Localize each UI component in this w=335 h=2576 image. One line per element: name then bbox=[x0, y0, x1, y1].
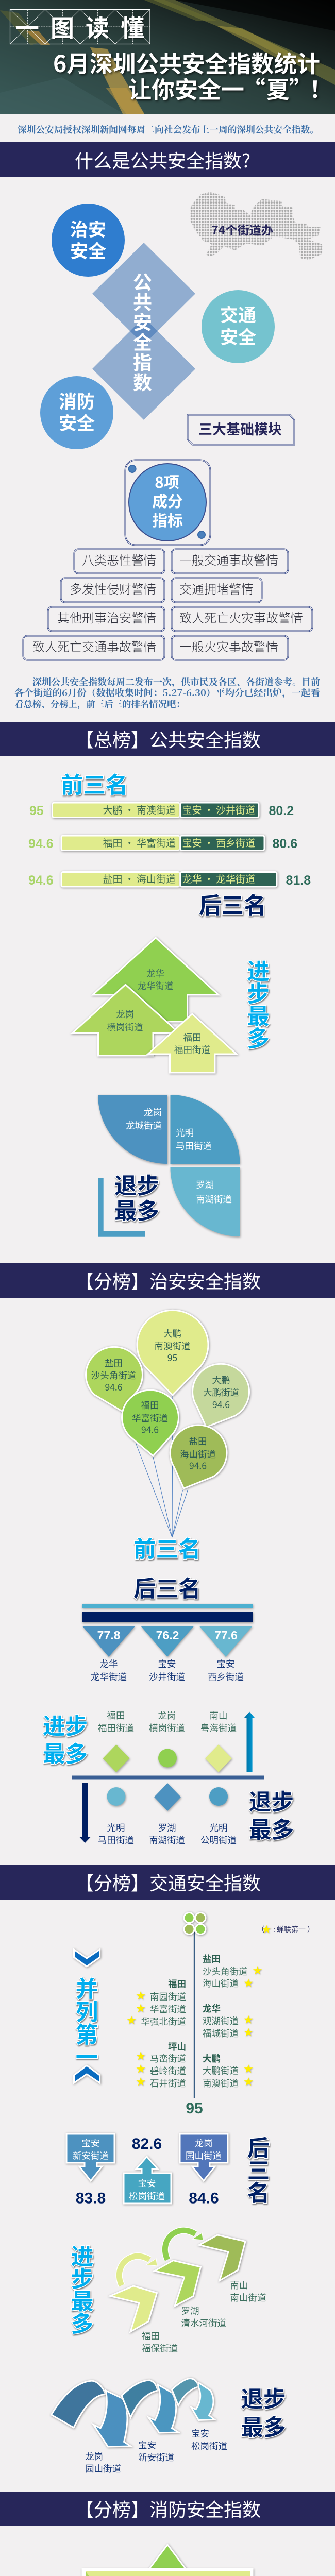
bottom three label: 后三名 bbox=[199, 888, 266, 920]
improved streets: 南山 bbox=[209, 1709, 228, 1722]
balloon: Dapeng Dapeng bbox=[193, 1364, 249, 1427]
arrow block: Longgang Yuanshan: 园山街道 bbox=[186, 2149, 222, 2162]
most improved label: 多 bbox=[247, 1021, 270, 1053]
diamonds: public safety index: 指 bbox=[133, 347, 152, 375]
balloon: Yantian Haishan: 盐田 bbox=[189, 1435, 207, 1448]
explanation paragraph: 各个街道的6月份（数据收集时间：5.27-6.30）平均分已经出炉，一起看 bbox=[14, 686, 320, 699]
regressed streets bbox=[98, 1783, 237, 1846]
diamond behind bbox=[58, 2545, 277, 2576]
diamonds: public safety index: 公 bbox=[133, 267, 152, 295]
right street list: 龙华 bbox=[203, 2002, 221, 2015]
balloon cluster bbox=[86, 1310, 249, 1537]
eight component indicators: 成分 bbox=[152, 489, 183, 512]
left street list: 马峦街道 bbox=[150, 2052, 186, 2065]
bar row 1: 80.2 bbox=[269, 804, 294, 818]
balloon: Yantian Shatoujiao bbox=[86, 1347, 142, 1417]
arrow: Futian: 福田 bbox=[183, 1031, 201, 1044]
tied first card bbox=[58, 2545, 277, 2576]
triangle: Bao'an Shajing: 沙井街道 bbox=[149, 1670, 185, 1683]
heading bar: 【分榜】消防安全指数 bbox=[75, 2495, 261, 2522]
left street list: 福田 bbox=[168, 1977, 186, 1990]
bar row 2: 宝安 · 西乡街道 bbox=[182, 836, 255, 850]
arc arrow: Longgang Yuanshan: 园山街道 bbox=[85, 2462, 121, 2475]
balloon: Yantian Haishan: 94.6 bbox=[189, 1459, 207, 1472]
main title: 让你安全一 bbox=[128, 71, 244, 105]
arrow block: Bao'an Xin'an: 宝安 bbox=[81, 2137, 100, 2149]
arrow: Longgang: 龙岗 bbox=[116, 1008, 134, 1021]
indicator names: 一般火灾事故警情 bbox=[179, 637, 278, 655]
heading bar: 【总榜】公共安全指数 bbox=[75, 725, 261, 752]
explanation paragraph: 看总榜、分榜上，前三后三的排名情况吧： bbox=[14, 698, 185, 710]
regressed streets: 南湖街道 bbox=[149, 1834, 185, 1846]
circle: traffic safety: 安全 bbox=[220, 323, 256, 349]
diamonds: public safety index: 全 bbox=[133, 327, 152, 355]
circle: fire safety: 安全 bbox=[59, 409, 95, 435]
triangle: Bao'an Xixiang: 西乡街道 bbox=[208, 1670, 244, 1683]
curved arrow green bbox=[165, 2230, 203, 2260]
triangle: Longhua: 龙华街道 bbox=[91, 1670, 127, 1683]
improved streets: 横岗街道 bbox=[149, 1722, 185, 1734]
balloon: Futian Huafu: 福田 bbox=[141, 1399, 159, 1412]
most regressed label: 退步 bbox=[114, 1168, 159, 1200]
quarter: Guangming Matian bbox=[170, 1095, 240, 1164]
balloon strings bbox=[136, 1396, 188, 1537]
star legend: （ bbox=[257, 1924, 264, 1935]
improved streets: 福田 bbox=[107, 1709, 125, 1722]
balloon: Dapeng Dapeng: 94.6 bbox=[212, 1398, 230, 1411]
tied first label: 一 bbox=[76, 2040, 98, 2072]
balloon: Dapeng Nan'ao: 95 bbox=[167, 1351, 177, 1364]
indicator names: 一般交通事故警情 bbox=[179, 550, 278, 568]
arrow: Futian: 福田街道 bbox=[174, 1043, 210, 1056]
most regressed label: 退步 bbox=[241, 2381, 286, 2414]
curved regress arrows bbox=[52, 2378, 227, 2475]
improved streets: 龙岗 bbox=[158, 1709, 176, 1722]
chevron: Futian Fubao bbox=[110, 2286, 178, 2354]
heading bar: 什么是公共安全指数? bbox=[75, 146, 250, 173]
regressed streets: 光明 bbox=[209, 1821, 228, 1834]
main title: 夏 bbox=[266, 71, 290, 105]
improved streets: 粤海街道 bbox=[200, 1722, 237, 1734]
bar row 2: 福田 · 华富街道 bbox=[103, 836, 176, 850]
triangle: Bao'an Xixiang: 77.6 bbox=[214, 1629, 238, 1642]
right street list: 南澳街道 bbox=[203, 2077, 239, 2090]
most improved label: 进步 bbox=[43, 1708, 88, 1741]
bar row 2: 94.6 bbox=[28, 837, 54, 851]
chevron: Luohu Qingshuihe bbox=[155, 2261, 226, 2330]
section: overall ranking bbox=[0, 722, 335, 1237]
main title: “ bbox=[242, 71, 265, 105]
arrow: Longgang bbox=[72, 985, 179, 1056]
arc arrow: Bao'an Xin'an: 新安街道 bbox=[138, 2451, 174, 2464]
title grid: 一图读懂: 读 bbox=[86, 10, 109, 44]
arrow block: Bao'an Songgang: 松岗街道 bbox=[129, 2190, 165, 2202]
balloon: Dapeng Nan'ao: 南澳街道 bbox=[155, 1340, 191, 1352]
most improved label: 最 bbox=[247, 998, 270, 1031]
bar row 2: 80.6 bbox=[272, 837, 297, 851]
title grid: 一图读懂 bbox=[10, 9, 150, 44]
balloon: Futian Huafu: 华富街道 bbox=[132, 1412, 168, 1425]
left street list: 华富街道 bbox=[150, 2003, 186, 2015]
regressed streets: 光明 bbox=[107, 1821, 125, 1834]
left street list: 南园街道 bbox=[150, 1990, 186, 2003]
arrow block: Bao'an Xin'an bbox=[66, 2134, 114, 2207]
circle: public order safety bbox=[52, 204, 125, 277]
arc arrow: Bao'an Songgang bbox=[172, 2378, 227, 2452]
arrow: Longhua bbox=[93, 938, 219, 1022]
tied first label: 第 bbox=[76, 2017, 98, 2049]
quarter: Luohu Nanhu bbox=[170, 1167, 240, 1236]
quarter: Luohu Nanhu: 罗湖 bbox=[196, 1178, 214, 1191]
balloon: Dapeng Nan'ao bbox=[137, 1310, 208, 1395]
main title: ！ bbox=[309, 71, 332, 105]
most improved label: 步 bbox=[71, 2261, 93, 2294]
explanation paragraph bbox=[14, 675, 320, 710]
balloon: Yantian Shatoujiao: 沙头角街道 bbox=[91, 1369, 136, 1382]
bar row 3 bbox=[28, 872, 311, 888]
arrow: Futian bbox=[148, 1014, 237, 1073]
main title bbox=[53, 45, 332, 105]
chevron up bbox=[74, 2065, 100, 2083]
indicator names: 其他刑事治安警情 bbox=[57, 608, 156, 626]
arrow block: Bao'an Xin'an: 83.8 bbox=[76, 2190, 106, 2207]
arrow block: Bao'an Songgang: 宝安 bbox=[138, 2177, 156, 2190]
quarter: Luohu Nanhu: 南湖街道 bbox=[196, 1193, 232, 1206]
quarter shapes: most regressed bbox=[98, 1095, 240, 1237]
left street list: 华强北街道 bbox=[141, 2015, 186, 2028]
improved streets: 福田街道 bbox=[98, 1722, 134, 1734]
chevron: Nanshan Nanshan: 南山街道 bbox=[230, 2291, 266, 2304]
heading bar bbox=[0, 2492, 335, 2526]
intro text: 深圳公安局授权深圳新闻网每周二向社会发布上一周的深圳公共安全指数。 bbox=[18, 123, 319, 136]
right street list bbox=[203, 1953, 262, 2090]
ranking bars bbox=[28, 803, 311, 888]
balloon: Dapeng Dapeng: 大鹏街道 bbox=[203, 1386, 239, 1399]
eight component indicators: 8项 bbox=[155, 470, 179, 493]
heading bar bbox=[0, 1865, 335, 1900]
top three label: 前三名 bbox=[133, 1531, 201, 1564]
arc arrow: Longgang Yuanshan: 龙岗 bbox=[85, 2450, 103, 2463]
most improved label: 进 bbox=[71, 2239, 93, 2271]
balloon: Dapeng Nan'ao: 大鹏 bbox=[163, 1327, 181, 1340]
triangle: Bao'an Xixiang: 宝安 bbox=[216, 1657, 235, 1670]
triangle: Bao'an Shajing bbox=[141, 1626, 194, 1683]
left street list: 石井街道 bbox=[150, 2077, 186, 2090]
bottom three: bars and triangles bbox=[82, 1604, 253, 1683]
bar row 3: 94.6 bbox=[28, 873, 54, 888]
balloon: Yantian Shatoujiao: 盐田 bbox=[105, 1357, 123, 1369]
arc arrow: Bao'an Xin'an bbox=[122, 2380, 178, 2464]
regressed streets: 马田街道 bbox=[98, 1834, 134, 1846]
quarter: Longgang Longcheng: 龙岗 bbox=[144, 1106, 162, 1119]
triangle: Longhua: 77.8 bbox=[97, 1629, 121, 1642]
quarter: Guangming Matian: 马田街道 bbox=[176, 1140, 212, 1152]
down arrow bbox=[80, 1783, 90, 1843]
indicator names: 交通拥堵警情 bbox=[179, 579, 254, 597]
main title: 6月深圳公共安全指数统计 bbox=[53, 45, 320, 79]
chevron: Nanshan Nanshan bbox=[199, 2235, 266, 2304]
arc arrow: Bao'an Songgang: 松岗街道 bbox=[191, 2439, 227, 2452]
header banner bbox=[0, 0, 335, 114]
triangle: Bao'an Xixiang bbox=[199, 1626, 253, 1683]
bar row 1: 95 bbox=[29, 804, 44, 818]
star legend: : 蝉联第一 bbox=[273, 1924, 306, 1935]
chevron down bbox=[74, 1950, 100, 1967]
bar row 1 bbox=[29, 803, 294, 818]
left street list: 坪山 bbox=[168, 2040, 186, 2053]
chevron: Luohu Qingshuihe: 罗湖 bbox=[181, 2304, 199, 2317]
explanation paragraph: 深圳公共安全指数每周二发布一次，供市民及各区、各街道参考。目前 bbox=[32, 675, 320, 688]
bottom three label: 后 bbox=[247, 2130, 270, 2163]
indicator list bbox=[23, 549, 312, 660]
arc arrow: Longgang Yuanshan bbox=[52, 2381, 131, 2475]
section: fire index bbox=[0, 2492, 335, 2576]
balloon: Yantian Haishan: 海山街道 bbox=[180, 1448, 216, 1461]
star legend: ） bbox=[307, 1924, 314, 1935]
circle: traffic safety: 交通 bbox=[220, 301, 256, 327]
right street list: 观湖街道 bbox=[203, 2014, 239, 2027]
arrow block: Bao'an Xin'an: 新安街道 bbox=[73, 2149, 109, 2162]
right street list: 大鹏 bbox=[203, 2052, 221, 2065]
arrow: Longgang: 横岗街道 bbox=[107, 1021, 143, 1033]
quarter: Longgang Longcheng bbox=[98, 1095, 167, 1164]
arrow: Longhua: 龙华 bbox=[146, 967, 164, 980]
curved arrow light bbox=[119, 2256, 157, 2285]
diamonds: public safety index bbox=[92, 243, 195, 420]
left street list bbox=[127, 1977, 186, 2090]
triangle: Longhua: 龙华 bbox=[100, 1657, 118, 1670]
corner bracket bbox=[98, 1178, 145, 1237]
heading bar bbox=[0, 722, 335, 756]
circle: traffic safety bbox=[202, 290, 275, 363]
indicator boxes bbox=[23, 549, 312, 660]
eight component indicators bbox=[125, 460, 210, 545]
heading bar: 【分榜】交通安全指数 bbox=[75, 1869, 261, 1895]
improved streets bbox=[98, 1709, 237, 1772]
card frame bbox=[81, 2568, 254, 2576]
three base modules box bbox=[188, 415, 294, 445]
three base modules box: 三大基础模块 bbox=[198, 418, 282, 438]
bottom three label: 三 bbox=[247, 2153, 270, 2185]
arrow block: Longgang Yuanshan bbox=[180, 2134, 228, 2207]
main title: ” bbox=[289, 71, 312, 105]
title grid: 一图读懂: 一 bbox=[15, 10, 39, 44]
bar row 3: 龙华 · 龙华街道 bbox=[182, 872, 255, 886]
diamonds: public safety index: 安 bbox=[133, 307, 152, 335]
top three label: 前三名 bbox=[61, 767, 128, 800]
most improved label: 进 bbox=[247, 954, 270, 986]
indicator names: 致人死亡火灾事故警情 bbox=[179, 608, 303, 626]
bar row 1: 大鹏 · 南澳街道 bbox=[103, 803, 176, 817]
section: traffic index bbox=[0, 1865, 335, 2475]
quarter: Longgang Longcheng: 龙城街道 bbox=[126, 1119, 162, 1132]
arrow block: Longgang Yuanshan: 龙岗 bbox=[195, 2137, 212, 2149]
bar row 2 bbox=[28, 836, 297, 851]
bottom three label: 名 bbox=[247, 2175, 270, 2208]
balloon: Yantian Shatoujiao: 94.6 bbox=[105, 1381, 123, 1394]
heading bar: 【分榜】治安安全指数 bbox=[75, 1267, 261, 1294]
circle: fire safety: 消防 bbox=[59, 387, 95, 414]
chevron: Futian Fubao: 福田 bbox=[142, 2330, 160, 2342]
chevron: Nanshan Nanshan: 南山 bbox=[230, 2279, 248, 2292]
score 95: 95 bbox=[186, 2100, 203, 2117]
triangle: Longhua bbox=[82, 1626, 135, 1683]
indicator names: 多发性侵财警情 bbox=[70, 579, 156, 597]
bar row 1: 宝安 · 沙井街道 bbox=[182, 803, 255, 817]
most improved label: 步 bbox=[247, 976, 270, 1009]
tied first label: 列 bbox=[76, 1994, 98, 2027]
most improved label: 多 bbox=[71, 2306, 93, 2338]
chevron: Luohu Qingshuihe: 清水河街道 bbox=[181, 2316, 226, 2330]
most regressed label: 最多 bbox=[114, 1193, 159, 1226]
right street list: 大鹏街道 bbox=[203, 2064, 239, 2077]
chevron steps bbox=[110, 2230, 266, 2354]
heading bar bbox=[0, 1263, 335, 1298]
title grid: 一图读懂: 图 bbox=[51, 10, 74, 44]
most regressed label: 最多 bbox=[241, 2410, 286, 2442]
arrow block: Bao'an Songgang: 82.6 bbox=[132, 2136, 162, 2153]
circle: public order safety: 治安 bbox=[70, 215, 106, 242]
eight component indicators: 指标 bbox=[152, 508, 183, 531]
chevron: Futian Fubao: 福保街道 bbox=[142, 2342, 178, 2354]
right street list: 盐田 bbox=[203, 1953, 221, 1965]
right street list: 福城街道 bbox=[203, 2027, 239, 2040]
up arrow bbox=[244, 1711, 255, 1772]
balloon: Futian Huafu bbox=[122, 1390, 178, 1456]
balloon: Yantian Haishan bbox=[170, 1425, 227, 1488]
circle: fire safety bbox=[40, 376, 113, 449]
bottom three label: 后三名 bbox=[133, 1571, 201, 1603]
dotted map: 74个街道办 bbox=[211, 221, 273, 238]
regressed streets: 公明街道 bbox=[200, 1834, 237, 1846]
most improved label: 最多 bbox=[43, 1736, 88, 1769]
arc arrow: Bao'an Xin'an: 宝安 bbox=[138, 2438, 156, 2451]
arrow block: Bao'an Songgang bbox=[124, 2136, 171, 2204]
bar row 3: 盐田 · 海山街道 bbox=[103, 872, 176, 886]
dotted map bbox=[190, 192, 323, 260]
arc arrow: Bao'an Songgang: 宝安 bbox=[191, 2427, 209, 2440]
most improved label: 最 bbox=[71, 2283, 93, 2316]
diamonds: public safety index: 共 bbox=[133, 287, 152, 315]
triangle: Bao'an Shajing: 宝安 bbox=[158, 1657, 176, 1670]
header bars bbox=[82, 1604, 253, 1622]
balloon: Dapeng Dapeng: 大鹏 bbox=[212, 1374, 230, 1386]
circle: public order safety: 安全 bbox=[70, 237, 106, 263]
arrow block: Longgang Yuanshan: 84.6 bbox=[189, 2190, 219, 2207]
tied first label: 并 bbox=[76, 1971, 98, 2004]
right street list: 沙头角街道 bbox=[203, 1965, 247, 1978]
most regressed label: 退步 bbox=[249, 1784, 294, 1817]
triangle: Bao'an Shajing: 76.2 bbox=[156, 1629, 179, 1642]
regressed streets: 罗湖 bbox=[158, 1821, 176, 1834]
divider bar bbox=[72, 1775, 264, 1780]
indicator names bbox=[32, 550, 303, 655]
indicator names: 致人死亡交通事故警情 bbox=[32, 637, 156, 655]
bar row 3: 81.8 bbox=[286, 873, 311, 888]
balloon: Futian Huafu: 94.6 bbox=[141, 1423, 159, 1436]
arrow: Longhua: 龙华街道 bbox=[137, 979, 173, 992]
up arrows: most improved bbox=[72, 938, 237, 1073]
diamonds: public safety index: 数 bbox=[133, 367, 152, 395]
right street list: 海山街道 bbox=[203, 1977, 239, 1990]
heading bar bbox=[0, 142, 335, 177]
left street list: 碧岭街道 bbox=[150, 2064, 186, 2077]
quarter: Guangming Matian: 光明 bbox=[176, 1126, 194, 1139]
indicator names: 八类恶性警情 bbox=[82, 550, 156, 568]
timeline with clover bbox=[184, 1912, 206, 2098]
title grid: 一图读懂: 懂 bbox=[121, 10, 144, 44]
section: what is the index bbox=[0, 142, 335, 710]
most regressed label: 最多 bbox=[249, 1812, 294, 1844]
section: public order index bbox=[0, 1263, 335, 1846]
star legend bbox=[257, 1924, 314, 1935]
